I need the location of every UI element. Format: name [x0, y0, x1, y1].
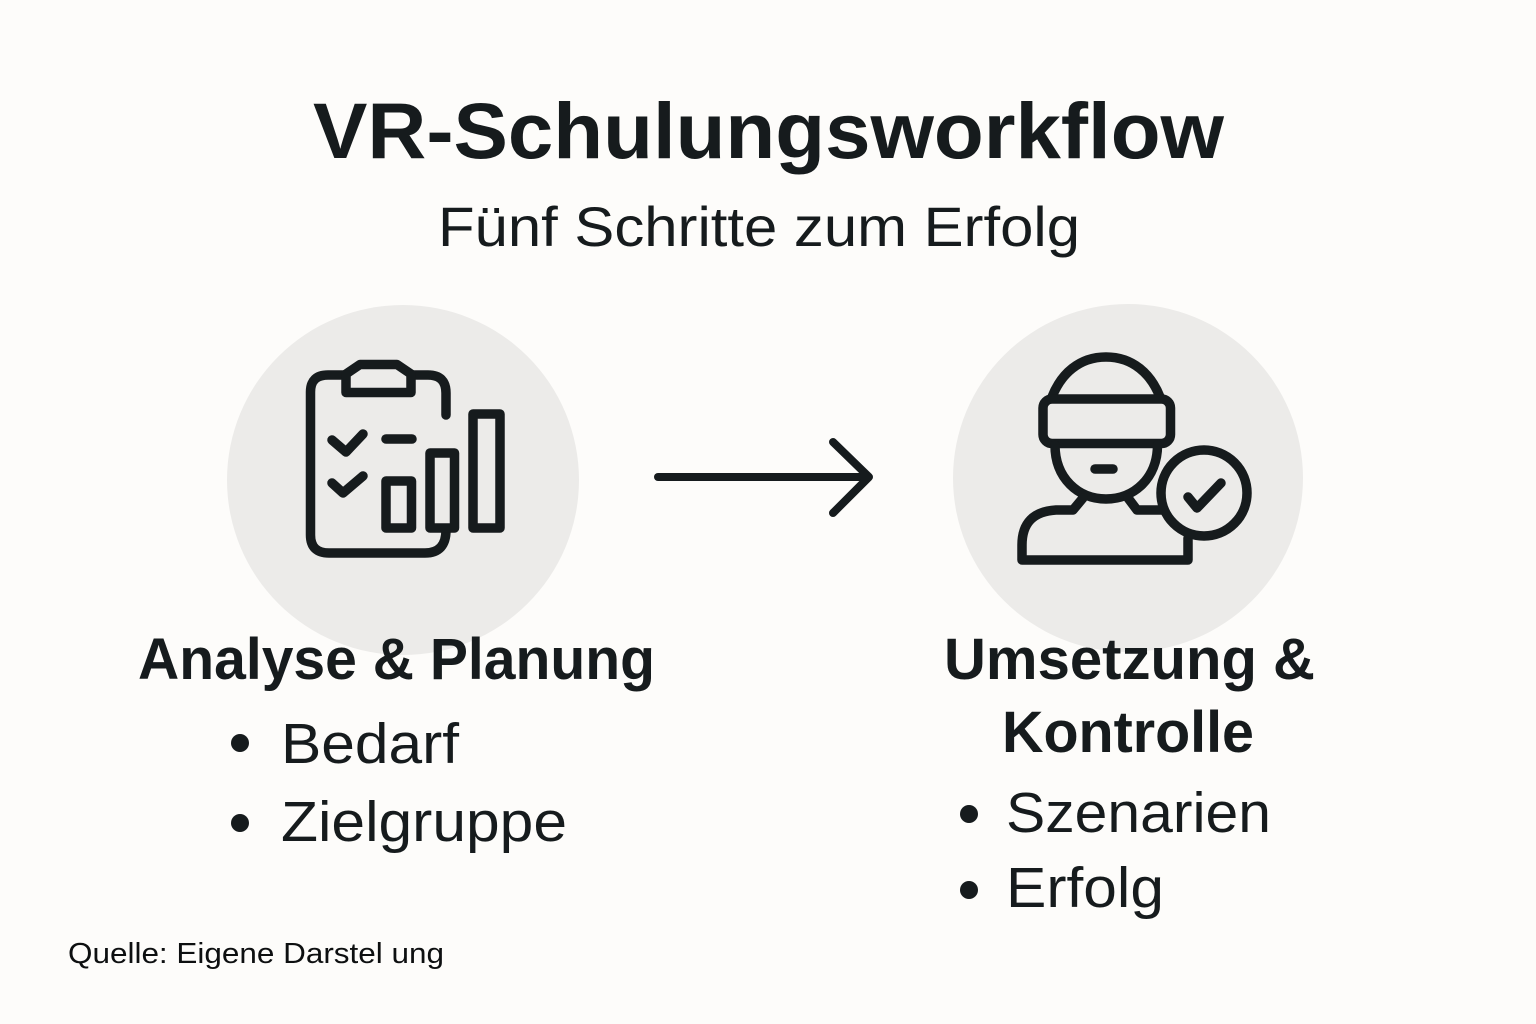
heading: Umsetzung und Kontrolle: Kontrolle: [1002, 700, 1254, 765]
heading: Umsetzung und Kontrolle: [944, 627, 1315, 765]
bullet list: Bedarf, Zielgruppe: Zielgruppe: [281, 790, 567, 854]
title: VR-Schulungsworkflow: [313, 86, 1225, 175]
subtitle: Fünf Schritte zum Erfolg: [438, 195, 1080, 258]
icon: clipboard with bar chart: [310, 364, 500, 553]
bullet list: Szenarien, Erfolg: Szenarien: [1006, 781, 1271, 845]
arrow: [658, 442, 869, 513]
bullet list: Szenarien, Erfolg: [960, 781, 1271, 920]
panel: umsetzung und kontrolle: [944, 304, 1315, 920]
heading: Umsetzung und Kontrolle: Umsetzung &: [944, 627, 1315, 692]
source note: Quelle: Eigene Darstel ung: [68, 938, 444, 970]
bullet list: Szenarien, Erfolg: Erfolg: [1006, 856, 1164, 920]
icon: VR headset user with check badge: [1022, 357, 1247, 560]
bullet list: Bedarf, Zielgruppe: [231, 712, 567, 854]
bullet list: Bedarf, Zielgruppe: Bedarf: [281, 712, 459, 776]
panel: analyse und planung: [138, 305, 655, 854]
icon background circle: umsetzung: [953, 304, 1303, 652]
icon background circle: analyse: [227, 305, 579, 655]
heading: Analyse und Planung: Analyse & Planung: [138, 627, 655, 692]
